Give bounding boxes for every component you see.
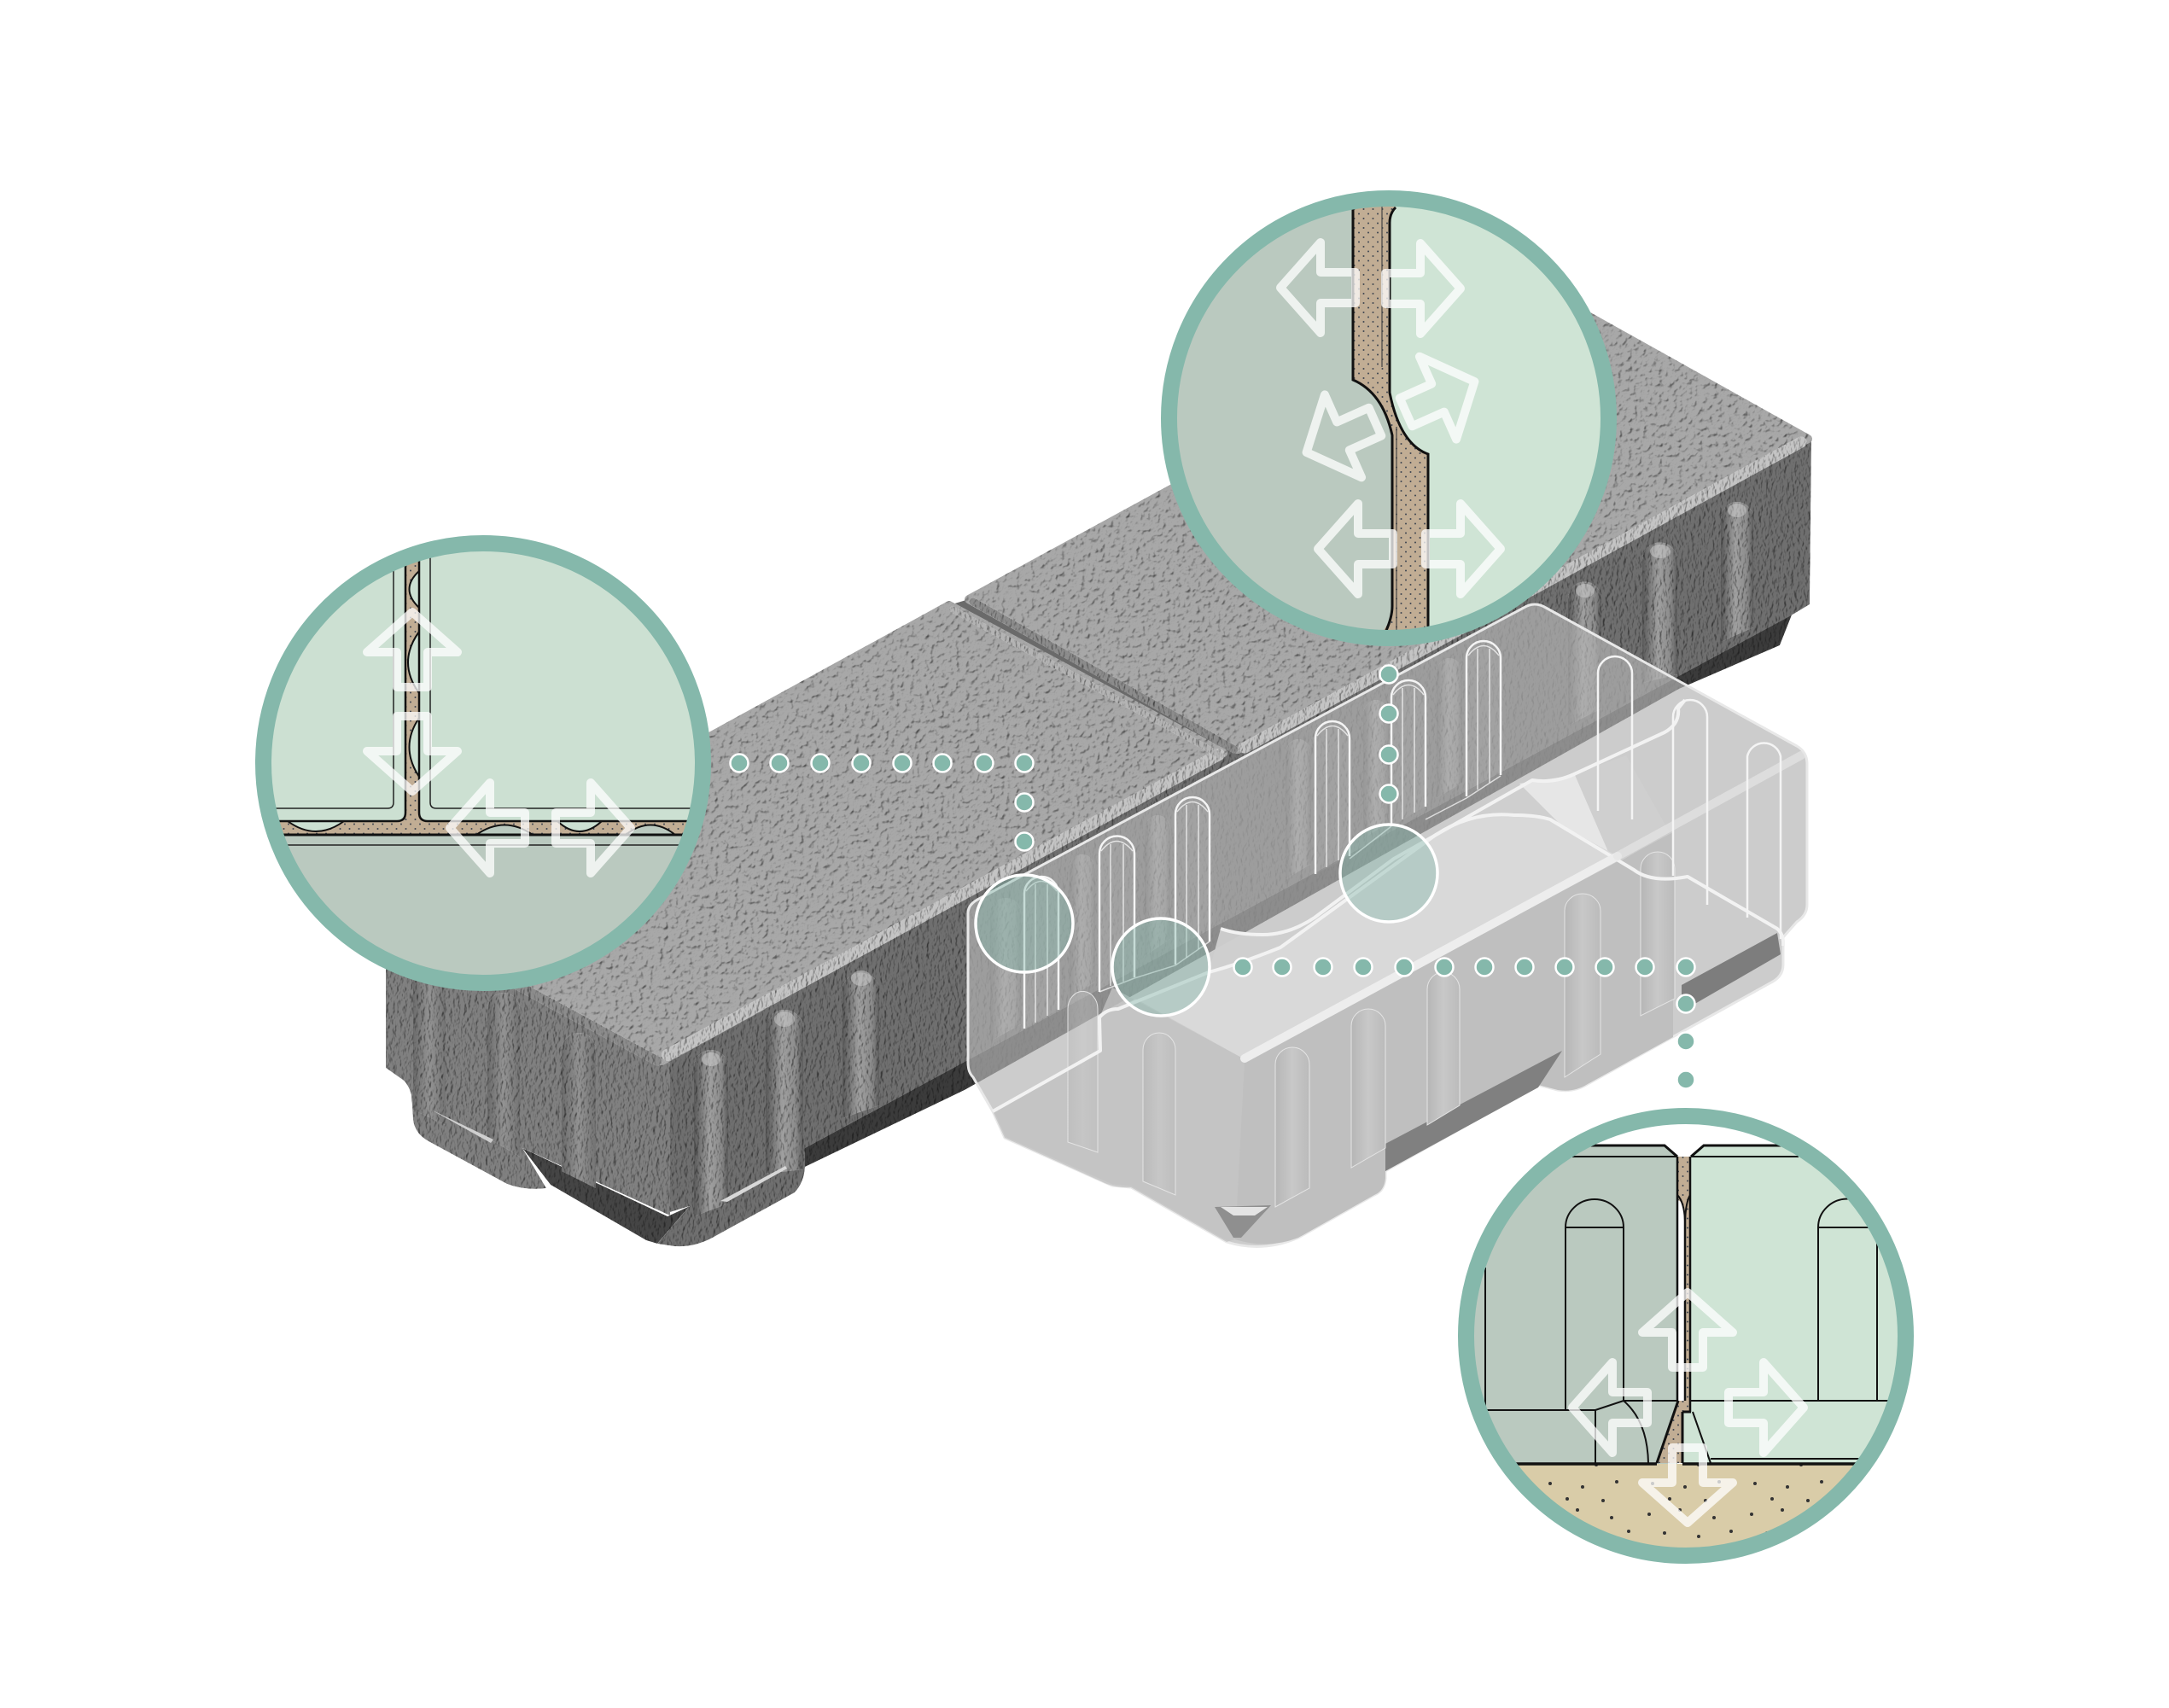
magnifier lens: middle: [1112, 918, 1210, 1016]
left paver section: [1474, 1147, 1677, 1464]
ghost corner wedge: [1215, 1205, 1271, 1238]
movement arrows: left detail: [367, 612, 631, 873]
detail circle: left, T-joint plan view: [256, 529, 717, 1006]
ghost contour outer: [993, 814, 1783, 1111]
left paver top surface: [388, 605, 1223, 1061]
ghost body: [968, 604, 1807, 1246]
right paver fill: [1391, 207, 1601, 627]
dark underside band, long side: [805, 613, 1793, 1167]
gap between pavers: [949, 599, 1238, 753]
ghost underside band center: [1385, 1051, 1562, 1171]
chamfer lines: [277, 558, 690, 846]
rib caps: [702, 504, 1746, 1066]
illustration: paver joints with magnified details: [255, 190, 1914, 1564]
end face: [386, 912, 670, 1215]
left paver fill: [1177, 210, 1391, 630]
top edge bevels: [393, 442, 1801, 1061]
ghost recessed floor between contours: [1209, 755, 1670, 972]
section linework: [1451, 1145, 1921, 1464]
spacer ribs on the end face: [413, 939, 596, 1188]
ghost underside band right: [1682, 933, 1781, 1011]
joint outlines: [1353, 191, 1392, 636]
dotted leader: middle lens to bottom detail: [1234, 958, 1695, 1089]
ring: [263, 543, 703, 983]
right paver section: [1691, 1147, 1898, 1463]
detail circle: bottom, vertical section: [1451, 1108, 1921, 1566]
movement arrows: bottom detail: [1572, 1292, 1804, 1523]
ghost contour inner: [1221, 700, 1685, 935]
joint sand: [280, 562, 686, 833]
base slivers: [720, 1166, 787, 1202]
ghost long face: [1235, 832, 1673, 1245]
dotted leader: left lens to left detail: [731, 755, 1033, 850]
magnifier lens: top: [1340, 825, 1437, 922]
movement arrows: top detail: [1280, 242, 1501, 594]
concrete paver pair: sides and feet: [386, 437, 1811, 1246]
ghost outlined ribs: [1024, 641, 1781, 1029]
joint sand: [1353, 191, 1428, 645]
ghost top surface: [1118, 814, 1618, 1059]
long side faces: [657, 437, 1811, 1246]
spacer bulges in joint: [288, 571, 602, 831]
detail circle: top, offset joint plan view: [1161, 191, 1622, 645]
ring: [1466, 1116, 1905, 1555]
spacer ribs on the long side: [694, 502, 1753, 1216]
ghost end face: [993, 988, 1245, 1242]
joint sand upper: [1677, 1157, 1690, 1401]
magnifier lens: left: [976, 875, 1073, 972]
ghost ribs on long face: [1068, 852, 1675, 1207]
joint sand lower: [1657, 1401, 1691, 1463]
right paver top surface: [969, 289, 1808, 749]
lower paver fill: [285, 837, 681, 975]
ghost top edge highlight: [1245, 856, 1618, 1058]
void notch: [1665, 1145, 1704, 1157]
ghost floor highlight: [1519, 775, 1609, 854]
dark underside band, end face: [522, 1148, 690, 1244]
translucent ghost paver: [968, 604, 1807, 1246]
ring: [1169, 198, 1608, 638]
ghost rib inner lines: [1026, 645, 1501, 1023]
joint outlines: [279, 561, 687, 823]
sand bed: [1451, 1464, 1921, 1566]
white sky: [1458, 1108, 1914, 1145]
dotted leader: top lens to top detail: [1379, 666, 1398, 802]
upper paver fill: [271, 551, 695, 820]
